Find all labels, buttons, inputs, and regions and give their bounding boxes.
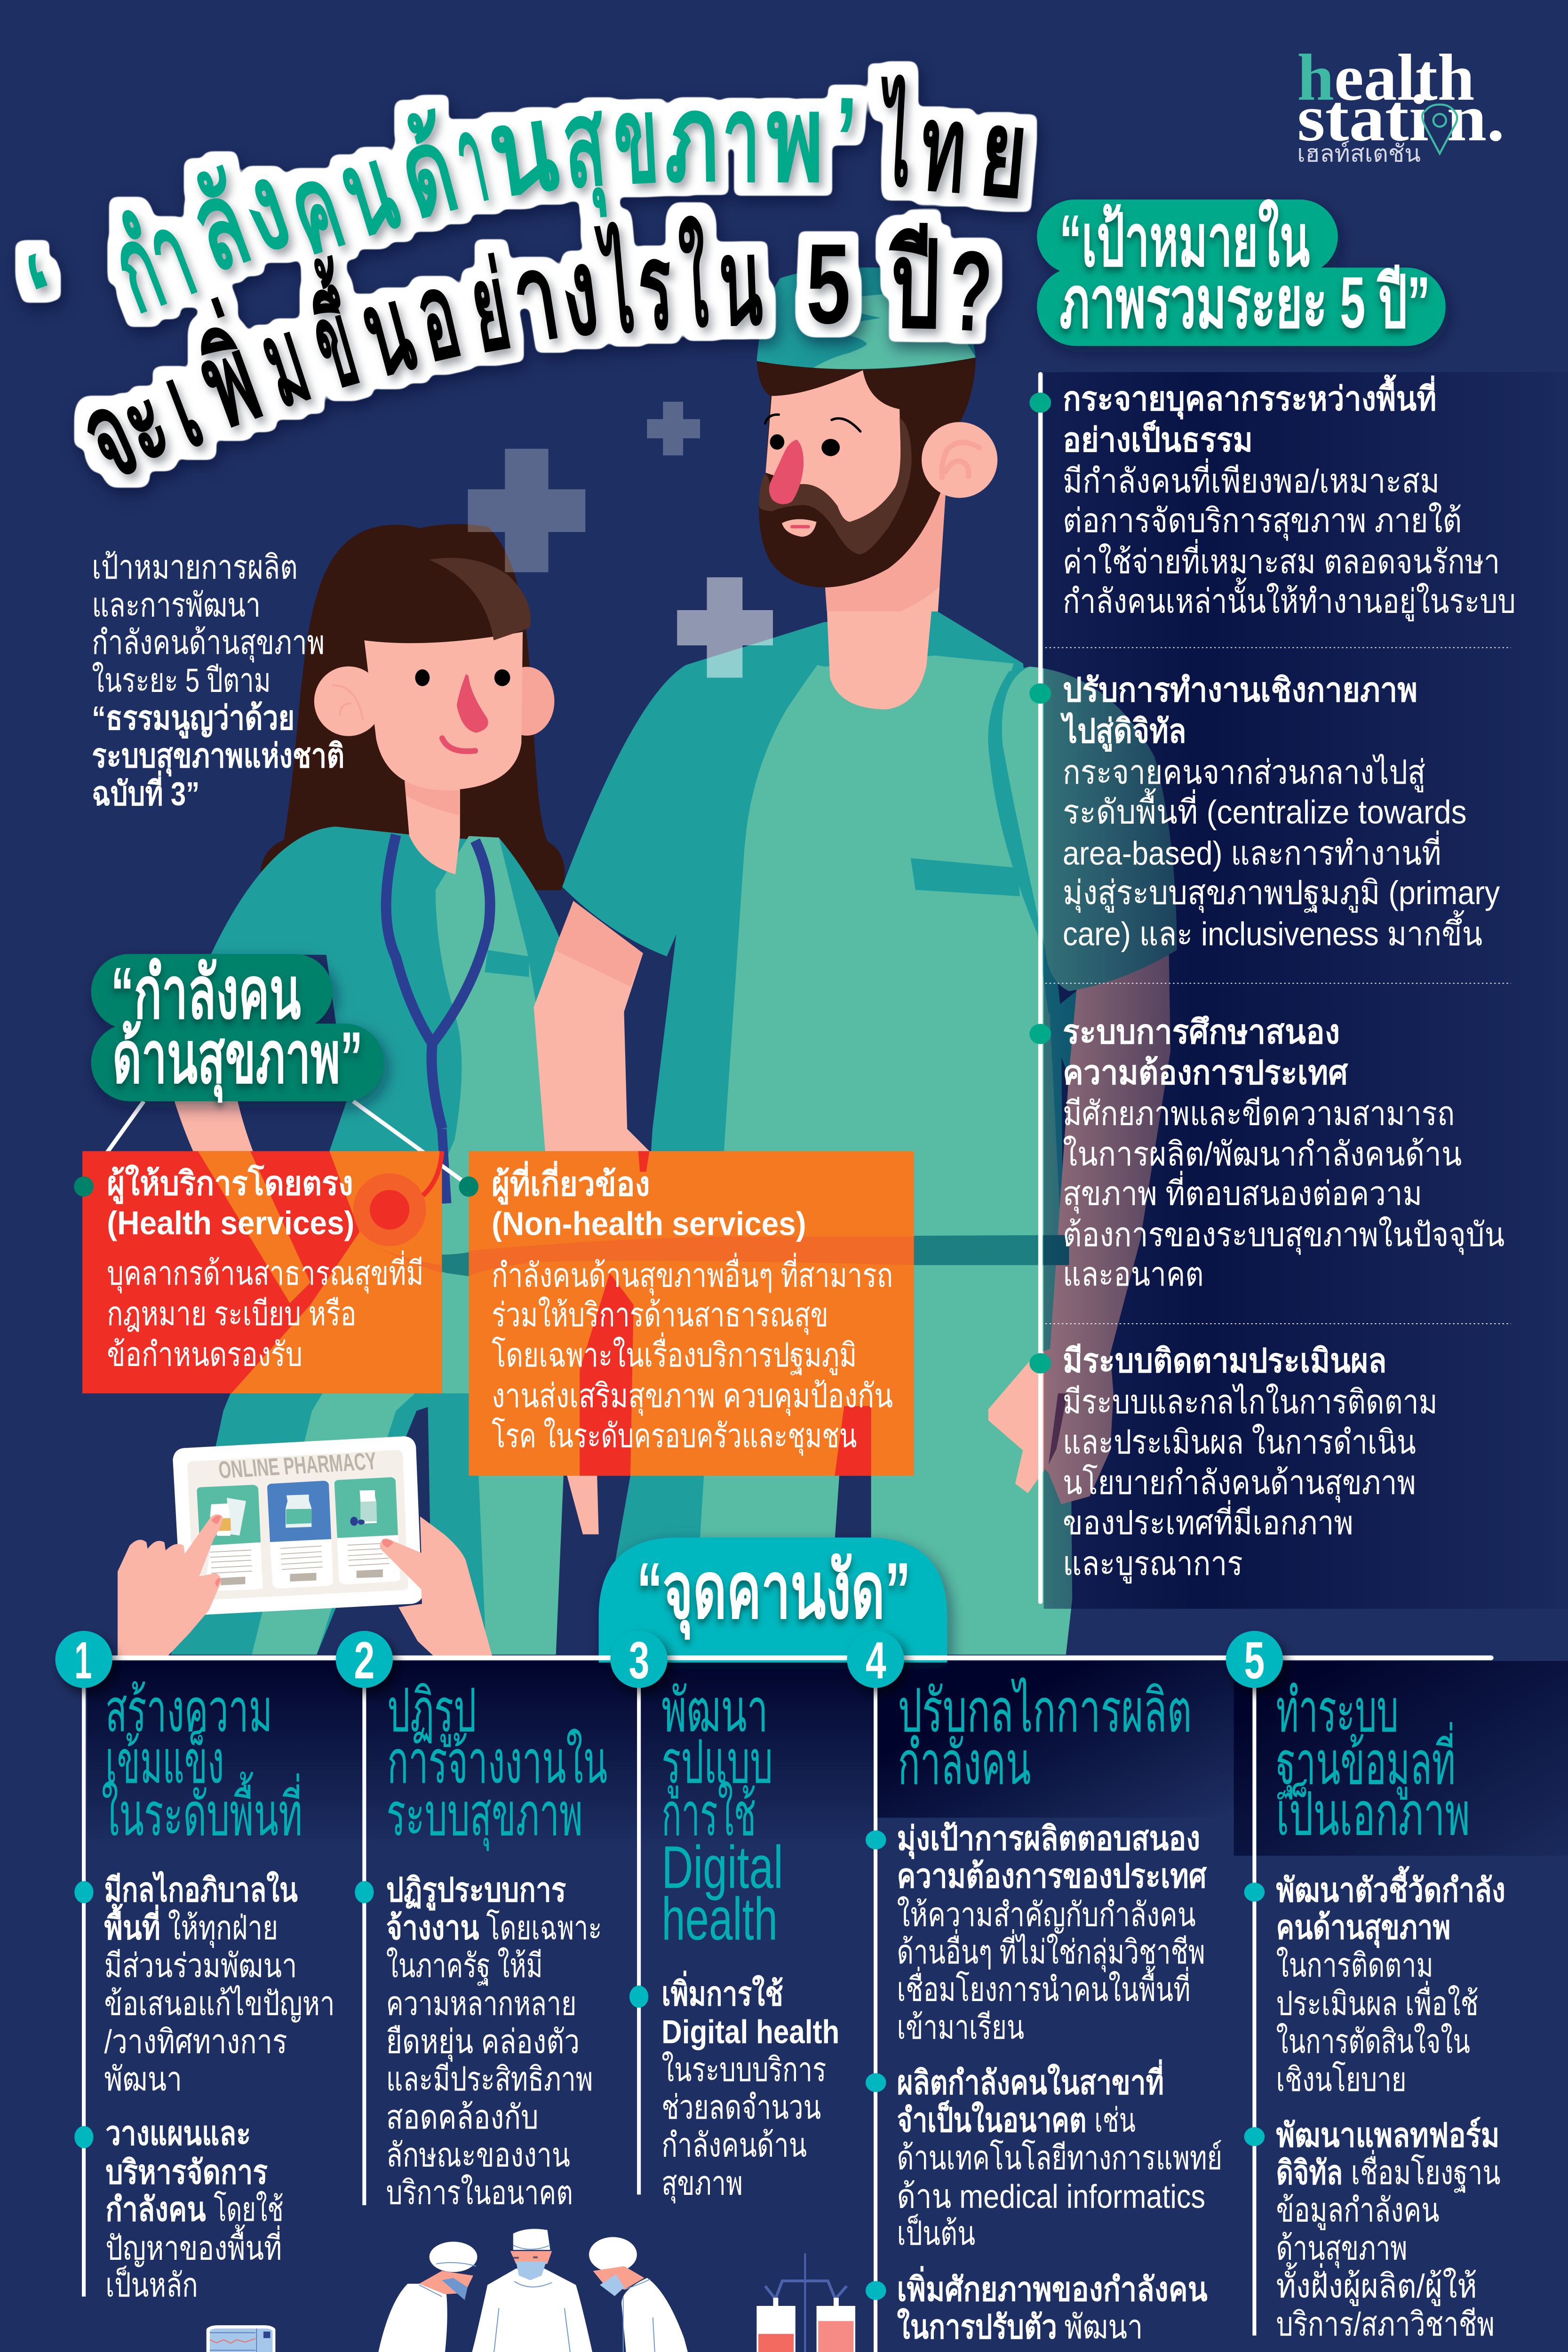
neck	[825, 475, 944, 709]
column body: ด้าน medical informatics	[897, 2177, 1205, 2215]
column body: ในการตัดสินใจใน	[1276, 2023, 1470, 2060]
logo: health station: health	[1297, 40, 1474, 114]
column body: มุ่งเป้าการผลิตตอบสนอง	[897, 1820, 1200, 1859]
goal 1 text: มีกำลังคนที่เพียงพอ/เหมาะสม	[1063, 458, 1440, 500]
column heading: การใช้	[661, 1781, 756, 1848]
number 1: 1	[74, 1631, 92, 1690]
title: น	[326, 119, 411, 262]
title: อ	[405, 247, 470, 386]
title: กำ	[97, 187, 211, 338]
column heading: ทำระบบ	[1276, 1677, 1399, 1745]
column 5	[1226, 1631, 1505, 2343]
goal 3 text: ความต้องการประเทศ	[1063, 1054, 1348, 1091]
column body: มีกลไกอภิบาลใน	[104, 1870, 298, 1908]
number 5	[1226, 1631, 1283, 1690]
goal 4 text: นโยบายกำลังคนด้านสุขภาพ	[1063, 1464, 1416, 1503]
icon: location pin	[1422, 104, 1457, 154]
right hand	[380, 1517, 492, 1656]
intro text block: และการพัฒนา	[92, 586, 261, 623]
column body: คนด้านสุขภาพ	[1276, 1909, 1451, 1948]
column body: ประเมินผล เพื่อใช้	[1276, 1981, 1479, 2022]
number 4: 4	[866, 1631, 886, 1690]
intro text block: กำลังคนด้านสุขภาพ	[92, 624, 325, 663]
column heading: ในระดับพื้นที่	[101, 1771, 302, 1848]
bullet dots	[866, 1830, 886, 2300]
column body: ลักษณะของงาน	[386, 2136, 570, 2173]
column body: โดยใช้	[214, 2191, 284, 2228]
title: ท	[917, 80, 971, 217]
surgeons	[470, 2229, 707, 2352]
title: น	[481, 79, 565, 222]
column body: ให้ความสำคัญกับกำลังคน	[897, 1896, 1196, 1933]
column body: พื้นที่	[104, 1903, 160, 1946]
column backdrops	[87, 1661, 1568, 1856]
column body: พัฒนาตัวชี้วัดกำลัง	[1276, 1866, 1505, 1909]
title: พ	[766, 72, 824, 207]
column heading	[1276, 1677, 1470, 1848]
illustration: man health worker	[534, 267, 1177, 1655]
panel: non-health services: ร่วมให้บริการด้านสาธารณสุข	[492, 1296, 828, 1335]
column 4	[847, 1631, 1222, 2352]
goal 2 text: มุ่งสู่ระบบสุขภาพปฐมภูมิ (primary	[1063, 874, 1500, 913]
bullet dot	[355, 1881, 374, 1903]
intro text block: “ธรรมนูญว่าด้วย	[92, 699, 294, 739]
panel: non-health services: โดยเฉพาะในเรื่องบริการปฐมภูมิ	[492, 1332, 857, 1375]
column body: ด้านสุขภาพ	[1276, 2229, 1408, 2268]
column body: สอดคล้องกับ	[386, 2098, 539, 2136]
column body	[661, 1971, 839, 2203]
logo: health station: เฮลท์สเตชัน	[1297, 140, 1421, 167]
column body: ด้านอื่นๆ ที่ไม่ใช่กลุ่มวิชาชีพ	[897, 1929, 1205, 1972]
marker dot	[74, 1176, 94, 1197]
column body: Digital health	[661, 2013, 839, 2050]
title: ง	[224, 138, 304, 278]
column body: ในภาครัฐ ให้มี	[386, 1947, 543, 1986]
column body: ผลิตกำลังคนในสาขาที่	[897, 2059, 1164, 2101]
pill: health workforce heading: ด้านสุขภาพ”	[112, 1017, 363, 1103]
column heading: รูปแบบ	[661, 1729, 773, 1799]
panel: five-year goals	[1029, 372, 1516, 1604]
panel: direct health services: กฎหมาย ระเบียบ หรือ	[107, 1295, 357, 1332]
goal 1 text	[1063, 374, 1516, 622]
title: ?	[946, 227, 995, 356]
column body: เพิ่มศักยภาพของกำลังคน	[897, 2266, 1208, 2308]
monitor on machine	[207, 2325, 311, 2352]
heading box: leverage points	[599, 1537, 947, 1662]
goal 1 text: ค่าใช้จ่ายที่เหมาะสม ตลอดจนรักษา	[1063, 539, 1500, 580]
column heading: ระบบสุขภาพ	[386, 1781, 583, 1851]
IV drip	[756, 2253, 855, 2352]
column body: เป็นต้น	[897, 2214, 975, 2252]
woman's arm	[174, 1100, 317, 1303]
column heading	[386, 1677, 607, 1851]
title: ไ	[874, 73, 915, 211]
timeline line	[87, 1655, 1494, 1660]
intro text block: เป้าหมายการผลิต	[92, 548, 298, 586]
pill: health workforce heading	[91, 952, 384, 1103]
title: ขึ้	[294, 254, 375, 414]
goal 3 text	[1063, 1013, 1504, 1293]
column body: ช่วยลดจำนวน	[661, 2089, 821, 2126]
panel: non-health services: โรค ในระดับครอบครัวและชุมชน	[492, 1417, 857, 1456]
goal 2 text: กระจายคนจากส่วนกลางไปสู่	[1063, 754, 1425, 793]
column body: พัฒนา	[1064, 2308, 1143, 2345]
column heading: ปรับกลไกการผลิต	[898, 1677, 1192, 1745]
marker dot	[459, 1176, 478, 1197]
column body	[386, 1871, 602, 2211]
goal 2 text: ระดับพื้นที่ (centralize towards	[1063, 788, 1467, 830]
panel: non-health services: ผู้ที่เกี่ยวข้อง	[492, 1160, 650, 1205]
title: ปี	[887, 217, 941, 353]
goal 2 text: area-based) และการทำงานที่	[1063, 830, 1441, 872]
column body: ข้อมูลกำลังคน	[1276, 2192, 1440, 2231]
column body: เช่น	[1094, 2101, 1136, 2138]
goal 1 text: ต่อการจัดบริการสุขภาพ ภายใต้	[1063, 502, 1462, 541]
goal 1 text: อย่างเป็นธรรม	[1063, 420, 1253, 458]
column body: บริการในอนาคต	[386, 2174, 573, 2211]
title: 5	[806, 221, 851, 348]
title: ย่	[461, 238, 519, 377]
column 3	[611, 1631, 839, 2203]
column body: ในระบบบริการ	[661, 2051, 826, 2088]
column body: ยืดหยุ่น คล่องตัว	[386, 2023, 580, 2062]
column heading: พัฒนา	[661, 1677, 768, 1744]
column heading: Digital	[661, 1834, 783, 1901]
title: น	[349, 261, 427, 402]
title: ร	[634, 219, 677, 355]
column heading: การจ้างงานใน	[387, 1729, 607, 1796]
goal 3 text: ในการผลิต/พัฒนากำลังคนด้าน	[1063, 1135, 1462, 1172]
goal 4 text: และประเมินผล ในการดำเนิน	[1063, 1423, 1416, 1461]
title: า	[722, 72, 760, 207]
man's arm and hand	[988, 950, 1170, 1504]
number 3: 3	[629, 1631, 649, 1690]
column body: บริหารจัดการ	[105, 2153, 268, 2191]
column body: พัฒนา	[104, 2060, 182, 2098]
intro text block: ระบบสุขภาพแห่งชาติ	[92, 737, 344, 777]
title: น	[717, 215, 764, 350]
panel: direct health services: ผู้ให้บริการโดยตรง	[107, 1164, 353, 1204]
goal 4 text	[1063, 1342, 1438, 1584]
column heading	[661, 1677, 783, 1953]
belt band	[363, 1235, 1069, 1276]
title: จะ	[64, 351, 188, 505]
goal 4 text: ของประเทศที่มีเอกภาพ	[1063, 1500, 1353, 1542]
column heading: สร้างความ	[105, 1677, 272, 1744]
column heading	[101, 1677, 302, 1848]
title: ข	[611, 72, 662, 209]
pill: health workforce heading: “กำลังคน	[111, 952, 301, 1033]
number 3	[611, 1631, 668, 1690]
pill: five-year overview heading	[1037, 199, 1446, 346]
intro text block	[92, 548, 344, 812]
column body: ด้านเทคโนโลยีทางการแพทย์	[897, 2139, 1222, 2177]
left hand	[118, 1514, 223, 1656]
panel: non-health services: กำลังคนด้านสุขภาพอื่นๆ ที่สามารถ	[492, 1252, 893, 1295]
column body	[104, 1870, 335, 2304]
number 2	[336, 1631, 393, 1690]
decorative medical crosses	[468, 402, 773, 678]
goal 4 text: และบูรณาการ	[1063, 1545, 1243, 1584]
column body: และมีประสิทธิภาพ	[386, 2060, 593, 2098]
pill: five-year overview heading: “เป้าหมายใน	[1059, 199, 1310, 281]
number 2: 2	[354, 1631, 374, 1690]
column body: ความหลากหลาย	[386, 1985, 576, 2022]
title: า	[445, 91, 497, 228]
column body: ปัญหาของพื้นที่	[105, 2224, 282, 2267]
column body: ดิจิทัล	[1276, 2154, 1343, 2191]
column body: มีส่วนร่วมพัฒนา	[104, 1947, 297, 1984]
illustration: tablet with online pharmacy	[118, 1436, 492, 1656]
panel: non-health services: (Non-health services)	[492, 1205, 806, 1242]
number 5: 5	[1244, 1631, 1265, 1690]
column body: เชื่อมโยงฐาน	[1351, 2150, 1501, 2193]
logo: health station	[1297, 40, 1504, 167]
column body: เป็นหลัก	[105, 2266, 198, 2304]
title: ’	[832, 72, 859, 207]
column body: บริการ/สภาวิชาชีพ	[1276, 2305, 1495, 2343]
title: เ	[148, 339, 217, 472]
man's head	[757, 267, 997, 612]
goal 2 text	[1060, 671, 1500, 953]
column body: โดยเฉพาะ	[486, 1909, 602, 1946]
column body: เข้ามาเรียน	[897, 2009, 1024, 2046]
title: ‘	[10, 227, 79, 362]
goal 2 text: care) และ inclusiveness มากขึ้น	[1063, 910, 1482, 953]
title: า	[504, 228, 567, 367]
goal 3 text: มีศักยภาพและขีดความสามารถ	[1063, 1095, 1455, 1132]
illustration: tablet with online pharmacy: ONLINE PHARMACY	[217, 1447, 378, 1484]
logo: health station: stati n.	[1297, 81, 1504, 155]
panel: direct health services: บุคลากรด้านสาธารณสุขที่มี	[107, 1250, 424, 1294]
column heading: health	[661, 1885, 778, 1953]
column body: วางแผนและ	[105, 2115, 251, 2152]
title: ใ	[677, 215, 711, 352]
title: สุ	[557, 75, 611, 220]
panel: direct health services: ข้อกำหนดรองรับ	[107, 1336, 302, 1373]
panel: non-health services	[459, 1151, 914, 1476]
column body: ความต้องการของประเทศ	[897, 1857, 1207, 1894]
column body: พัฒนาแพลทฟอร์ม	[1276, 2117, 1500, 2154]
title: ไ	[594, 220, 639, 359]
title: ม	[247, 292, 323, 431]
goal 3 text: สุขภาพ ที่ตอบสนองต่อความ	[1063, 1171, 1422, 1214]
column body: ปฏิรูประบบการ	[386, 1871, 566, 1911]
column body: จำเป็นในอนาคต	[897, 2100, 1087, 2138]
illustration: woman health worker	[171, 524, 573, 1655]
column body: เพิ่มการใช้	[661, 1971, 783, 2012]
title: ด้	[387, 101, 469, 244]
title: ลั	[175, 154, 265, 297]
bullet dots	[74, 1881, 94, 2148]
column heading: ปฏิรูป	[387, 1677, 477, 1747]
column body: ข้อเสนอแก้ไขปัญหา	[104, 1985, 335, 2023]
panel: non-health services: งานส่งเสริมสุขภาพ ควบคุมป้องกัน	[492, 1377, 893, 1416]
marker dots	[1029, 392, 1051, 1374]
column body: จ้างงาน	[386, 1909, 479, 1946]
column lines	[82, 1660, 1256, 2352]
column body: กำลังคนด้าน	[661, 2127, 807, 2164]
column body: ทั้งฝั่งผู้ผลิต/ผู้ให้	[1276, 2262, 1477, 2306]
bullet dot	[629, 1986, 648, 2008]
goal 4 text: มีระบบและกลไกในการติดตาม	[1063, 1383, 1438, 1421]
goal 2 text: ปรับการทำงานเชิงกายภาพ	[1063, 671, 1417, 708]
column 2	[336, 1631, 607, 2211]
heading box: leverage points: “จุดคานงัด”	[637, 1546, 911, 1640]
column heading: เข้มแข็ง	[105, 1726, 224, 1796]
connector lines	[89, 1101, 462, 1180]
man's near arm	[534, 901, 649, 1534]
goal 2 text: ไปสู่ดิจิทัล	[1060, 712, 1186, 752]
number 4	[847, 1631, 904, 1690]
title: ค	[274, 138, 358, 279]
right panel backdrop	[1044, 372, 1568, 1609]
title: ภ	[663, 71, 719, 207]
panel: direct health services: (Health services)	[107, 1204, 354, 1241]
column heading: กำลังคน	[898, 1730, 1031, 1797]
goal 3 text: และอนาคต	[1063, 1255, 1204, 1293]
column body: /วางทิศทางการ	[104, 2023, 287, 2060]
goal 1 text: กระจายบุคลากรระหว่างพื้นที่	[1063, 374, 1437, 420]
column body: ในการติดตาม	[1276, 1947, 1433, 1984]
column body: ในการปรับตัว	[897, 2307, 1057, 2345]
illustration: surgery team	[187, 2229, 855, 2352]
bullet dots	[1244, 1883, 1265, 2146]
title	[10, 71, 1033, 505]
column body: เชื่อมโยงการนำคนในพื้นที่	[897, 1966, 1190, 2008]
goal 4 text: มีระบบติดตามประเมินผล	[1063, 1342, 1387, 1379]
number 1	[55, 1631, 112, 1690]
column body	[1276, 1866, 1505, 2343]
column body	[897, 1820, 1222, 2352]
column heading	[898, 1677, 1192, 1797]
title: พิ่	[179, 295, 275, 453]
column body: สุขภาพ	[661, 2164, 743, 2203]
column body: ให้ทุกฝ่าย	[168, 1909, 278, 1948]
goal 3 text: ระบบการศึกษาสนอง	[1063, 1013, 1340, 1050]
title: ง	[554, 223, 605, 361]
intro text block: ในระยะ 5 ปีตาม	[92, 661, 271, 699]
goal 3 text: ต้องการของระบบสุขภาพในปัจจุบัน	[1063, 1216, 1504, 1255]
column body: กำลังคน	[105, 2191, 206, 2228]
column body: เชิงนโยบาย	[1276, 2061, 1407, 2098]
title: ย	[975, 85, 1033, 223]
intro text block: ฉบับที่ 3”	[92, 770, 199, 812]
column 1	[55, 1631, 335, 2304]
panel: direct health services	[74, 1151, 442, 1393]
